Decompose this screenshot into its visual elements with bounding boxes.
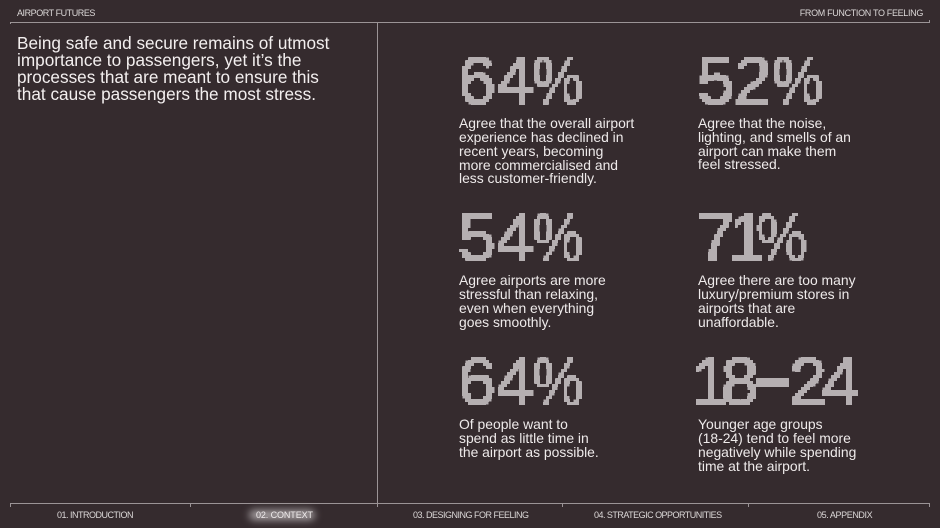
stat: 54%: 5 xyxy=(458,200,496,276)
stat: 18-24: – xyxy=(758,350,787,408)
nav: context: 02. CONTEXT xyxy=(256,510,313,520)
description 4 xyxy=(698,272,856,330)
stat: 54%: 4 xyxy=(496,200,534,276)
stat: 64% second: 4 xyxy=(496,344,534,420)
stat: 71%: 1 xyxy=(728,200,766,276)
stat: 64% second: % xyxy=(532,345,583,420)
description 6 xyxy=(698,416,856,474)
description 5 xyxy=(459,416,599,460)
stat: 71%: 7 xyxy=(697,200,735,276)
description 6: time at the airport. xyxy=(698,458,810,474)
nav: strategic opportunities: 04. STRATEGIC OPPORTUNITIES xyxy=(594,510,722,520)
navigation highlight glow xyxy=(249,510,315,520)
description 5: Of people want to xyxy=(459,416,568,432)
intro statement: importance to passengers, yet it’s the xyxy=(17,50,301,70)
description 5: the airport as possible. xyxy=(459,444,599,460)
intro statement: processes that are meant to ensure this xyxy=(17,67,319,87)
stat: 71%: % xyxy=(756,201,807,276)
description 6: (18-24) tend to feel more xyxy=(698,430,851,446)
stat: 71% xyxy=(697,200,807,276)
description 2: feel stressed. xyxy=(698,156,781,172)
stat: 64% second xyxy=(458,344,583,420)
description 1: more commercialised and xyxy=(459,157,618,173)
description 3 xyxy=(459,272,606,330)
description 5: spend as little time in xyxy=(459,430,589,446)
description 2: lighting, and smells of an xyxy=(698,129,851,145)
description 1: recent years, becoming xyxy=(459,143,603,159)
description 2: airport can make them xyxy=(698,143,836,159)
description 3: Agree airports are more xyxy=(459,272,606,288)
stat: 64% xyxy=(458,43,583,119)
description 1: Agree that the overall airport xyxy=(459,115,634,131)
intro statement: Being safe and secure remains of utmost xyxy=(17,33,329,53)
intro statement xyxy=(17,33,330,104)
stat: 64%: % xyxy=(532,44,583,119)
description 1: experience has declined in xyxy=(459,129,623,145)
stat: 64% second: 6 xyxy=(458,344,496,420)
stat: 52%: 5 xyxy=(697,43,735,119)
intro statement: that cause passengers the most stress. xyxy=(17,84,316,104)
description 3: even when everything xyxy=(459,300,594,316)
stat: 18-24: 1 xyxy=(691,344,729,420)
stat: 52%: % xyxy=(772,44,823,119)
stat: 54%: % xyxy=(532,201,583,276)
description 2: Agree that the noise, xyxy=(698,115,826,131)
header right label: FROM FUNCTION TO FEELING xyxy=(800,8,923,18)
stat: 64%: 6 xyxy=(458,43,496,119)
description 4: Agree there are too many xyxy=(698,272,856,288)
description 3: goes smoothly. xyxy=(459,314,551,330)
stat: 18-24: 4 xyxy=(822,344,860,420)
description 1: less customer-friendly. xyxy=(459,170,597,186)
description 6: Younger age groups xyxy=(698,416,823,432)
stat: 18-24: 8 xyxy=(721,344,759,420)
stat: 18-24: 2 xyxy=(789,344,827,420)
nav: appendix: 05. APPENDIX xyxy=(817,510,872,520)
description 4: airports that are xyxy=(698,300,795,316)
stat: 18-24 xyxy=(691,344,860,420)
header left label: AIRPORT FUTURES xyxy=(17,8,95,18)
stat: 54% xyxy=(458,200,583,276)
nav: designing for feeling: 03. DESIGNING FOR FEELING xyxy=(413,510,529,520)
stat: 64%: 4 xyxy=(496,43,534,119)
description 6: negatively while spending xyxy=(698,444,856,460)
description 4: luxury/premium stores in xyxy=(698,286,849,302)
nav: introduction: 01. INTRODUCTION xyxy=(57,510,133,520)
description 2 xyxy=(698,115,851,172)
stat: 52%: 2 xyxy=(734,43,772,119)
description 3: stressful than relaxing, xyxy=(459,286,598,302)
description 1 xyxy=(459,115,634,186)
description 4: unaffordable. xyxy=(698,314,779,330)
stat: 52% xyxy=(697,43,823,119)
